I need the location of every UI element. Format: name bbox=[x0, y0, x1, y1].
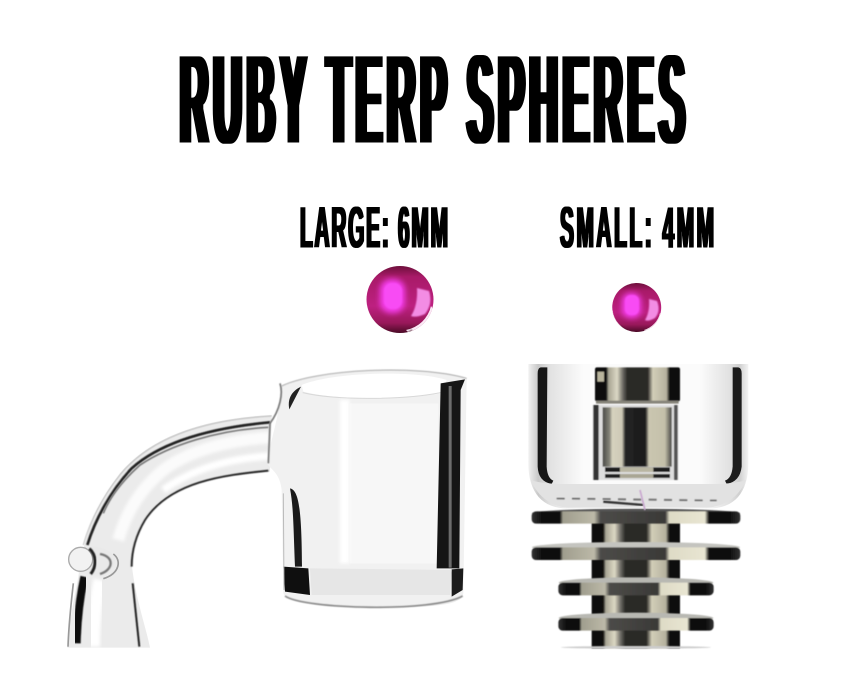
heat-sink stem bbox=[592, 522, 680, 648]
glass dish bbox=[528, 364, 748, 510]
bucket body bbox=[267, 370, 467, 607]
label: small size: SMALL: 4MM bbox=[560, 197, 714, 261]
arm and joint tube bbox=[67, 415, 272, 648]
icon: small ruby sphere bbox=[612, 283, 662, 332]
icon: large ruby sphere bbox=[366, 266, 434, 333]
joint bump bbox=[68, 547, 118, 579]
banger: clear quartz nail with bucket bbox=[67, 370, 467, 648]
inner titanium post bbox=[593, 367, 680, 480]
title: RUBY TERP SPHERES bbox=[180, 27, 685, 173]
titanium nail with glass dish bbox=[528, 364, 748, 649]
heat-sink fins bbox=[532, 509, 740, 649]
label: large size: LARGE: 6MM bbox=[300, 197, 448, 261]
